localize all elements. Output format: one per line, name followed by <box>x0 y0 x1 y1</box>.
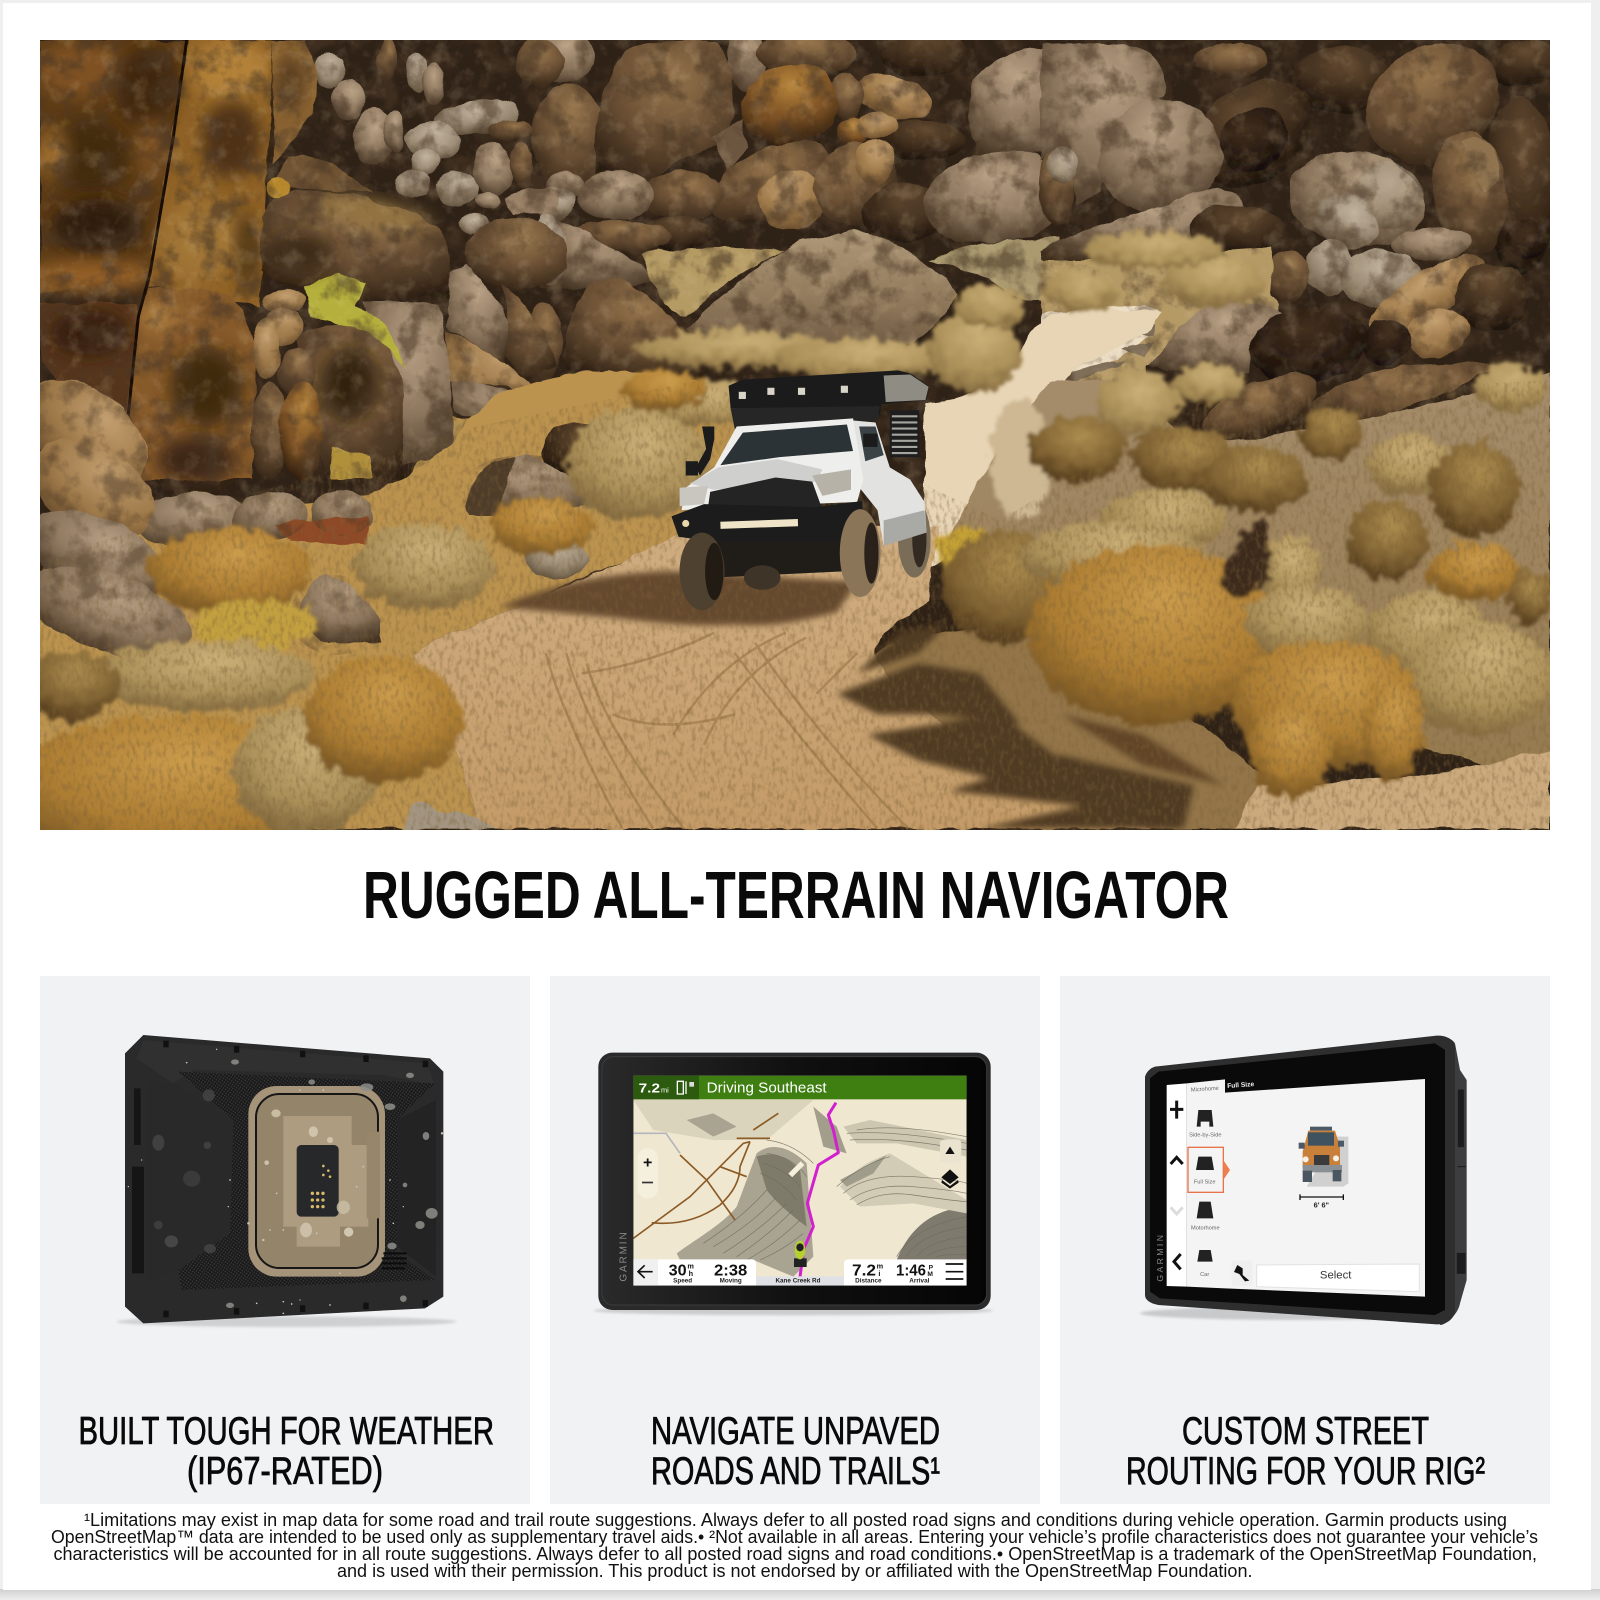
footnote: ¹Limitations may exist in map data for some road and trail route suggestions. Always defer to all posted road signs and conditions during vehicle operation. Garmin products using <box>84 1510 1507 1530</box>
undercarriage <box>716 539 842 577</box>
rock mottling texture <box>40 40 1550 600</box>
vehicle list labels: Car <box>1200 1272 1209 1278</box>
side buttons <box>1457 1090 1466 1273</box>
device body <box>125 1035 443 1323</box>
cliff colour patches <box>30 40 435 483</box>
vent <box>382 1253 407 1268</box>
direction banner: Driving Southeast <box>707 1080 827 1096</box>
vehicle list <box>1187 1079 1225 1288</box>
right panel <box>397 1100 436 1277</box>
wrench button <box>1232 1261 1252 1286</box>
selection arrow <box>1224 1161 1230 1179</box>
panel: trails <box>550 976 1040 1504</box>
direction banner: 7.2 <box>639 1081 660 1096</box>
vehicle list labels: Microhome <box>1191 1086 1219 1094</box>
brand: GARMIN <box>618 1232 629 1282</box>
panel background <box>1060 976 1550 1504</box>
right data bar: m <box>877 1262 884 1271</box>
side ladder <box>890 410 919 457</box>
width gauge: 6' 6" <box>1314 1200 1329 1209</box>
zoom controls <box>637 1148 658 1198</box>
mesh grid <box>178 1072 435 1290</box>
right rock field <box>1038 19 1560 453</box>
vehicle list labels: Side-by-Side <box>1189 1133 1222 1139</box>
screen <box>633 1076 967 1286</box>
device shadow <box>593 1306 993 1315</box>
middle wheel <box>744 565 781 590</box>
panel background <box>550 976 1040 1504</box>
left data bar: m <box>687 1262 694 1271</box>
windshield <box>720 424 853 465</box>
hero background <box>40 40 1550 830</box>
trail tyre tracks <box>546 633 908 829</box>
lower rock mottling <box>40 380 580 655</box>
left panel <box>147 1082 233 1283</box>
layers control <box>941 1169 959 1189</box>
cab front <box>682 418 863 510</box>
left data bar: 2:38 <box>714 1262 747 1279</box>
tan mount bracket <box>248 1086 385 1277</box>
right data bar <box>844 1259 967 1286</box>
width gauge <box>1300 1194 1343 1209</box>
white truck side <box>852 420 927 546</box>
bezel <box>1150 1043 1445 1315</box>
zoom controls: + <box>643 1154 652 1171</box>
panel: routing <box>1060 976 1550 1504</box>
snorkel <box>696 427 714 476</box>
right data bar: P <box>929 1264 934 1271</box>
brand: GARMIN <box>1155 1235 1165 1282</box>
panel heading: NAVIGATE UNPAVED <box>651 1410 940 1453</box>
title: RUGGED ALL-TERRAIN NAVIGATOR <box>363 858 1229 933</box>
water drops <box>152 1059 438 1308</box>
left rail <box>1167 1083 1187 1287</box>
right data bar: M <box>927 1271 933 1278</box>
rock crack <box>127 40 187 423</box>
panel heading <box>78 1410 494 1493</box>
connector plate <box>297 1145 339 1217</box>
device shadow <box>1140 1307 1453 1320</box>
mirror <box>863 434 878 447</box>
vehicle list icons <box>1196 1110 1214 1262</box>
centre rock field <box>528 30 1060 380</box>
select button <box>1257 1264 1419 1292</box>
left mirror <box>686 461 698 476</box>
map base <box>633 1076 967 1286</box>
upper shell bevel <box>137 1040 435 1085</box>
ground and trail <box>40 308 1550 829</box>
device: navigator map screen <box>593 1053 993 1315</box>
panel heading <box>651 1410 940 1493</box>
rail icons <box>1170 1101 1183 1269</box>
footnote: and is used with their permission. This product is not endorsed by or affiliated with the OpenStreetMap Foundation. <box>337 1561 1252 1581</box>
panel heading: CUSTOM STREET <box>1182 1410 1429 1453</box>
footnote: OpenStreetMap™ data are intended to be used only as supplementary travel aids.• ²Not available in all areas. Entering your vehicle’s profile characteristics does not guarantee your vehicle’s <box>51 1527 1538 1547</box>
hero photo: off-road truck on desert trail <box>6 19 1560 867</box>
select button: Select <box>1320 1269 1352 1281</box>
right data bar: Distance <box>855 1278 882 1285</box>
vehicle marker <box>794 1241 807 1267</box>
vehicle list labels <box>1189 1086 1222 1278</box>
left data bar: h <box>689 1269 694 1278</box>
right data bar: Arrival <box>909 1278 930 1285</box>
left headlight <box>680 486 708 506</box>
contour lines <box>703 1128 967 1260</box>
grille <box>706 478 824 520</box>
device shadow <box>117 1316 457 1327</box>
direction banner: mi <box>661 1086 669 1095</box>
device: rugged back with water drops <box>117 1035 457 1327</box>
panel: weather <box>40 976 530 1504</box>
roof rack and tent <box>729 370 929 429</box>
device body <box>1145 1036 1455 1324</box>
device: custom vehicle profile screen <box>1140 1036 1467 1325</box>
terrain shading <box>633 1100 967 1277</box>
device bezel <box>602 1057 987 1305</box>
map contour label <box>788 1161 804 1177</box>
truck <box>671 370 931 610</box>
magenta route <box>800 1103 838 1277</box>
side slots <box>132 1088 144 1273</box>
bottom card shadow <box>0 1589 1600 1600</box>
door shade <box>884 510 927 546</box>
contact pins <box>311 1165 331 1208</box>
footnote: characteristics will be accounted for in all route suggestions. Always defer to all posted road signs and road conditions.• OpenStreetMap is a trademark of the OpenStreetMap Foundation, <box>54 1544 1537 1564</box>
LED light bar <box>720 519 798 529</box>
shadows on the trail and bank <box>500 571 1224 829</box>
screws <box>163 1041 428 1317</box>
left data bar: Moving <box>720 1278 742 1285</box>
panel heading: BUILT TOUGH FOR WEATHER <box>78 1410 494 1453</box>
fog lamp <box>682 520 689 527</box>
side window <box>859 427 884 461</box>
brown trails <box>633 1113 778 1238</box>
screen main <box>1225 1079 1425 1297</box>
left data bar: Speed <box>673 1278 692 1285</box>
lower boulders <box>40 380 590 830</box>
title bar label: Full Size <box>1227 1081 1255 1090</box>
vehicle list labels: Full Size <box>1194 1179 1216 1185</box>
front left tyre <box>680 533 724 610</box>
panel background <box>40 976 530 1504</box>
selected item outline <box>1188 1147 1223 1192</box>
right data bar: 1:46 <box>896 1262 926 1279</box>
side edge <box>1440 1037 1467 1325</box>
hood <box>690 459 822 490</box>
panel heading: ROADS AND TRAILS¹ <box>651 1450 940 1493</box>
rear far tyre <box>898 510 931 578</box>
front right tyre <box>840 509 881 597</box>
grass and desert shrubs <box>10 232 1555 867</box>
grass fibre texture <box>40 340 1550 830</box>
vehicle list labels: Motorhome <box>1191 1225 1220 1231</box>
footnote <box>51 1510 1538 1581</box>
orange jeep illustration <box>1299 1127 1348 1187</box>
north arrow control <box>940 1139 961 1163</box>
right data bar: i <box>878 1269 880 1278</box>
panel heading: (IP67-RATED) <box>187 1450 383 1493</box>
device body <box>598 1053 991 1310</box>
left boulder cliff <box>40 37 567 497</box>
gray road <box>633 1133 680 1153</box>
small droplets <box>128 1049 443 1314</box>
panel heading <box>1126 1410 1485 1493</box>
left data bar: 30 <box>669 1262 687 1279</box>
rock highlight texture <box>40 40 1550 600</box>
direction banner <box>633 1076 967 1099</box>
right data bar: 7.2 <box>852 1262 876 1279</box>
bumper <box>671 501 863 542</box>
left data bar <box>633 1259 756 1286</box>
road name <box>756 1276 844 1286</box>
road name: Kane Creek Rd <box>775 1278 821 1285</box>
right headlight <box>812 469 851 496</box>
